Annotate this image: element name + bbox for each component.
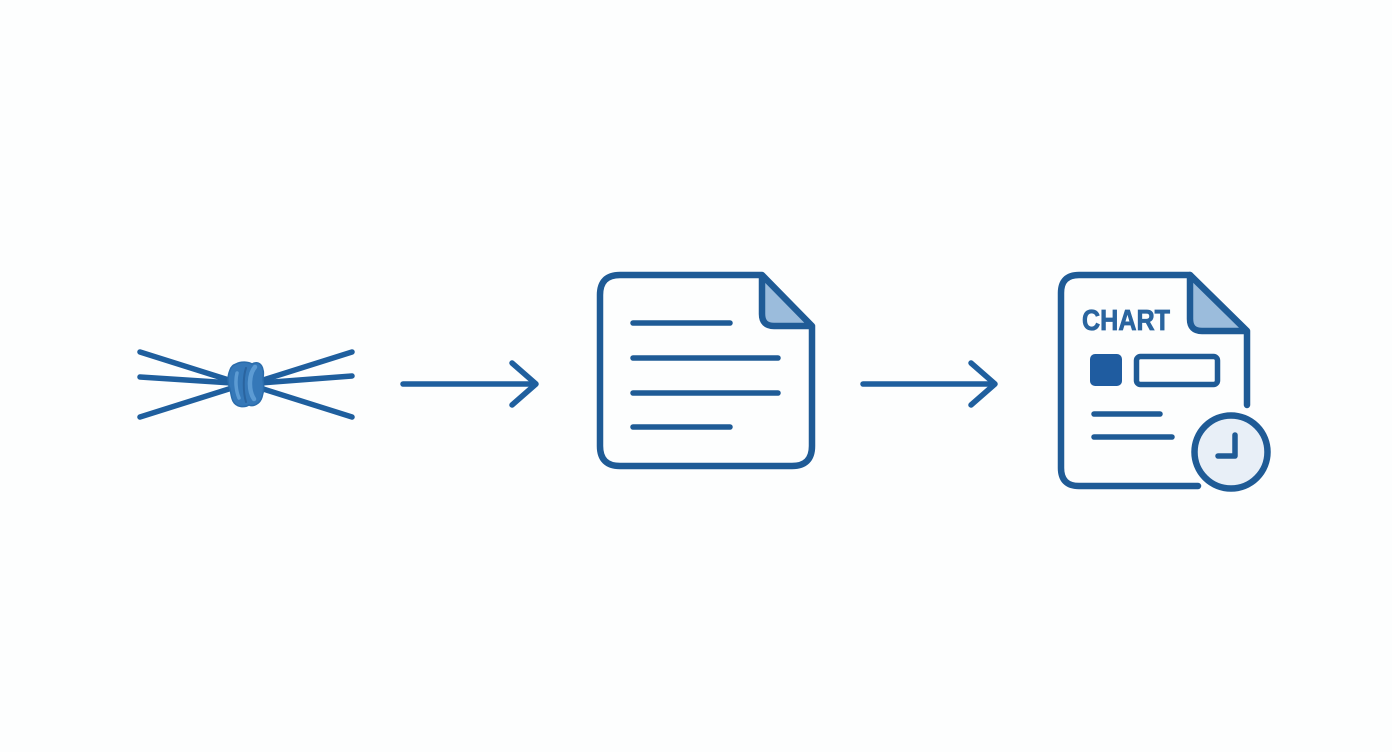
icon: text document [600, 275, 812, 466]
icon: tangled knot of strands [140, 352, 352, 417]
chart text lines [1094, 414, 1172, 437]
document fold [762, 277, 811, 326]
arrow: document to chart [863, 363, 995, 405]
icon: clock [1194, 416, 1268, 488]
icon: chart document with clock [1061, 275, 1268, 488]
chart filled square [1090, 354, 1122, 386]
chart label: CHART [1082, 305, 1170, 337]
document text lines [633, 323, 778, 427]
chart document outline and fold [1061, 275, 1247, 486]
arrow: knot to document [403, 363, 536, 405]
chart outlined bar [1136, 356, 1218, 384]
